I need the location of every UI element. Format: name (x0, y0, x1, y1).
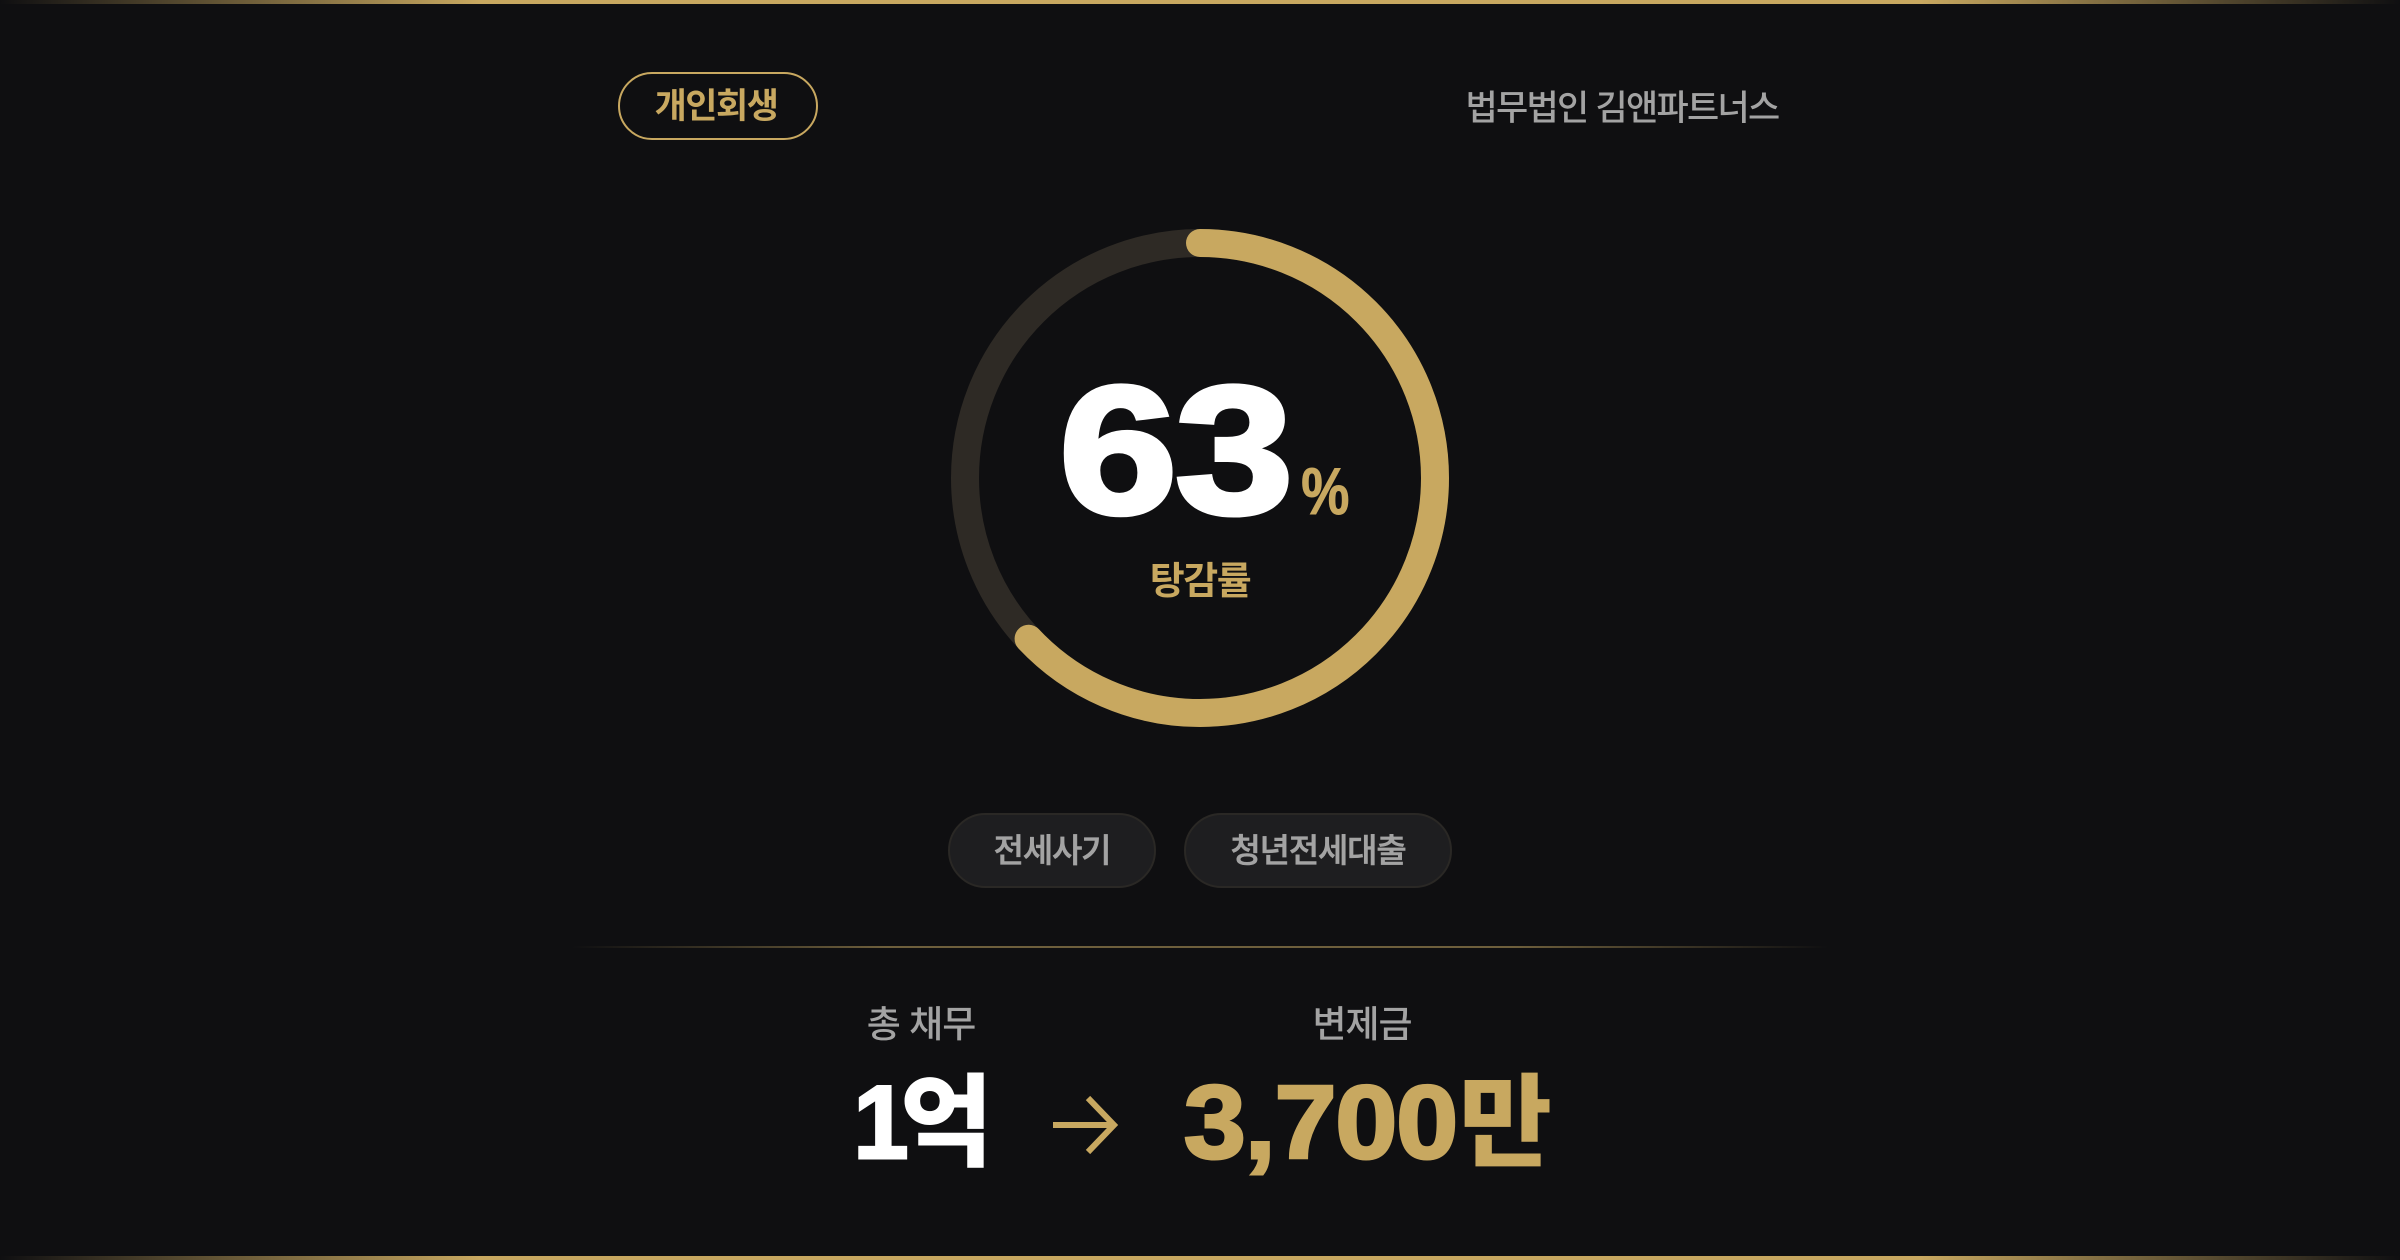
divider (572, 946, 1828, 948)
category badge: 개인회생 (655, 78, 777, 129)
category badge (618, 72, 818, 140)
tag: jeonse fraud: 전세사기 (994, 824, 1110, 872)
repayment value (1184, 1042, 1552, 1188)
tag: youth jeonse loan: 청년전세대출 (1231, 824, 1405, 872)
repayment value: 만 (1459, 1042, 1552, 1188)
percent sign: % (1301, 454, 1349, 528)
tag: youth jeonse loan (1184, 813, 1452, 888)
arrow (1053, 1096, 1118, 1154)
donut chart: 63% (951, 229, 1449, 727)
total debt value: 억 (900, 1042, 993, 1188)
total debt value (854, 1042, 993, 1188)
bottom gold bar (0, 1256, 2400, 1260)
repayment value: 3,700 (1184, 1065, 1457, 1181)
top gold bar (0, 0, 2400, 4)
law firm name: 법무법인 김앤파트너스 (1465, 80, 1779, 131)
tag: jeonse fraud (948, 813, 1156, 888)
total debt label: 총 채무 (867, 994, 975, 1048)
repayment label: 변제금 (1312, 994, 1412, 1048)
reduction rate label: 탕감률 (1150, 550, 1250, 605)
total debt value: 1 (854, 1065, 908, 1181)
big number 63: 63 (1059, 348, 1291, 552)
